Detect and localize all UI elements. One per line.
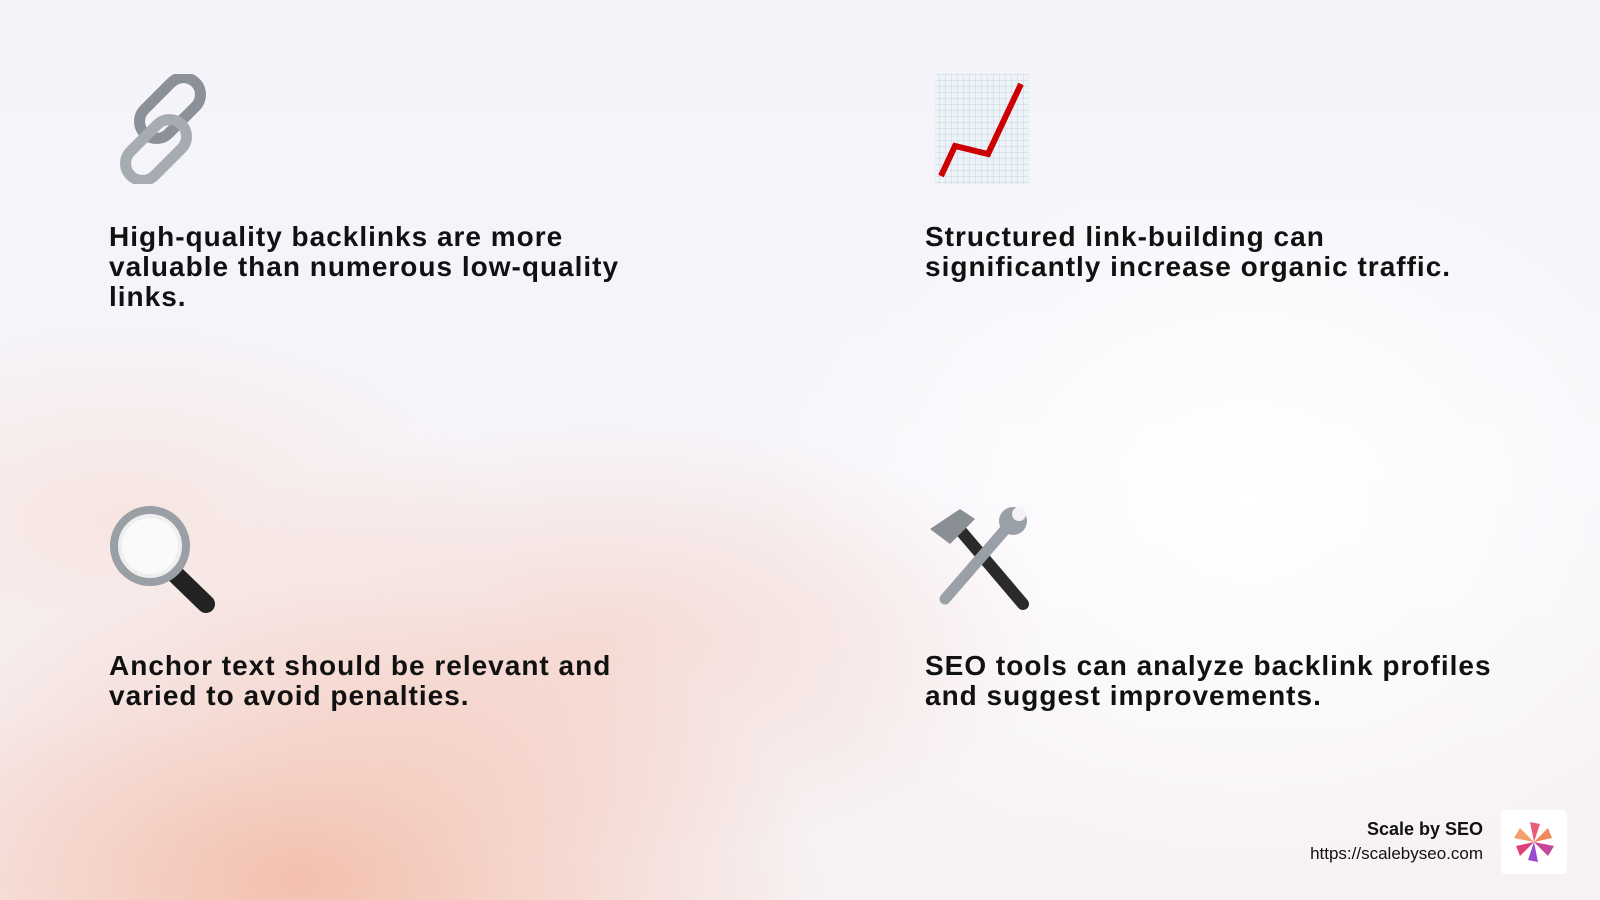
icon: chart increasing bbox=[935, 74, 1029, 184]
text: SEO tools: and suggest improvements. bbox=[925, 680, 1322, 711]
text: structured link-building: significantly increase organic traffic. bbox=[925, 251, 1451, 282]
text: backlinks quality: links. bbox=[109, 281, 187, 312]
text: structured link-building: Structured link-building can bbox=[925, 221, 1325, 252]
text: SEO tools: SEO tools can analyze backlink profiles bbox=[925, 650, 1492, 681]
text: anchor text: Anchor text should be relevant and bbox=[109, 650, 611, 681]
logo bbox=[1501, 810, 1567, 874]
footer brand: Scale by SEO bbox=[1367, 819, 1483, 839]
text: backlinks quality bbox=[109, 221, 619, 312]
text: backlinks quality: High-quality backlinks are more bbox=[109, 221, 563, 252]
icon: hammer and wrench bbox=[930, 507, 1029, 610]
icon: chain link bbox=[120, 74, 206, 184]
text: anchor text: varied to avoid penalties. bbox=[109, 680, 470, 711]
text: backlinks quality: valuable than numerous low-quality bbox=[109, 251, 619, 282]
icon: magnifying glass bbox=[110, 506, 215, 613]
text: anchor text bbox=[109, 650, 611, 711]
footer brand: https://scalebyseo.com bbox=[1310, 844, 1483, 863]
text: structured link-building bbox=[925, 221, 1451, 282]
text: SEO tools bbox=[925, 650, 1492, 711]
footer brand bbox=[1310, 819, 1483, 863]
